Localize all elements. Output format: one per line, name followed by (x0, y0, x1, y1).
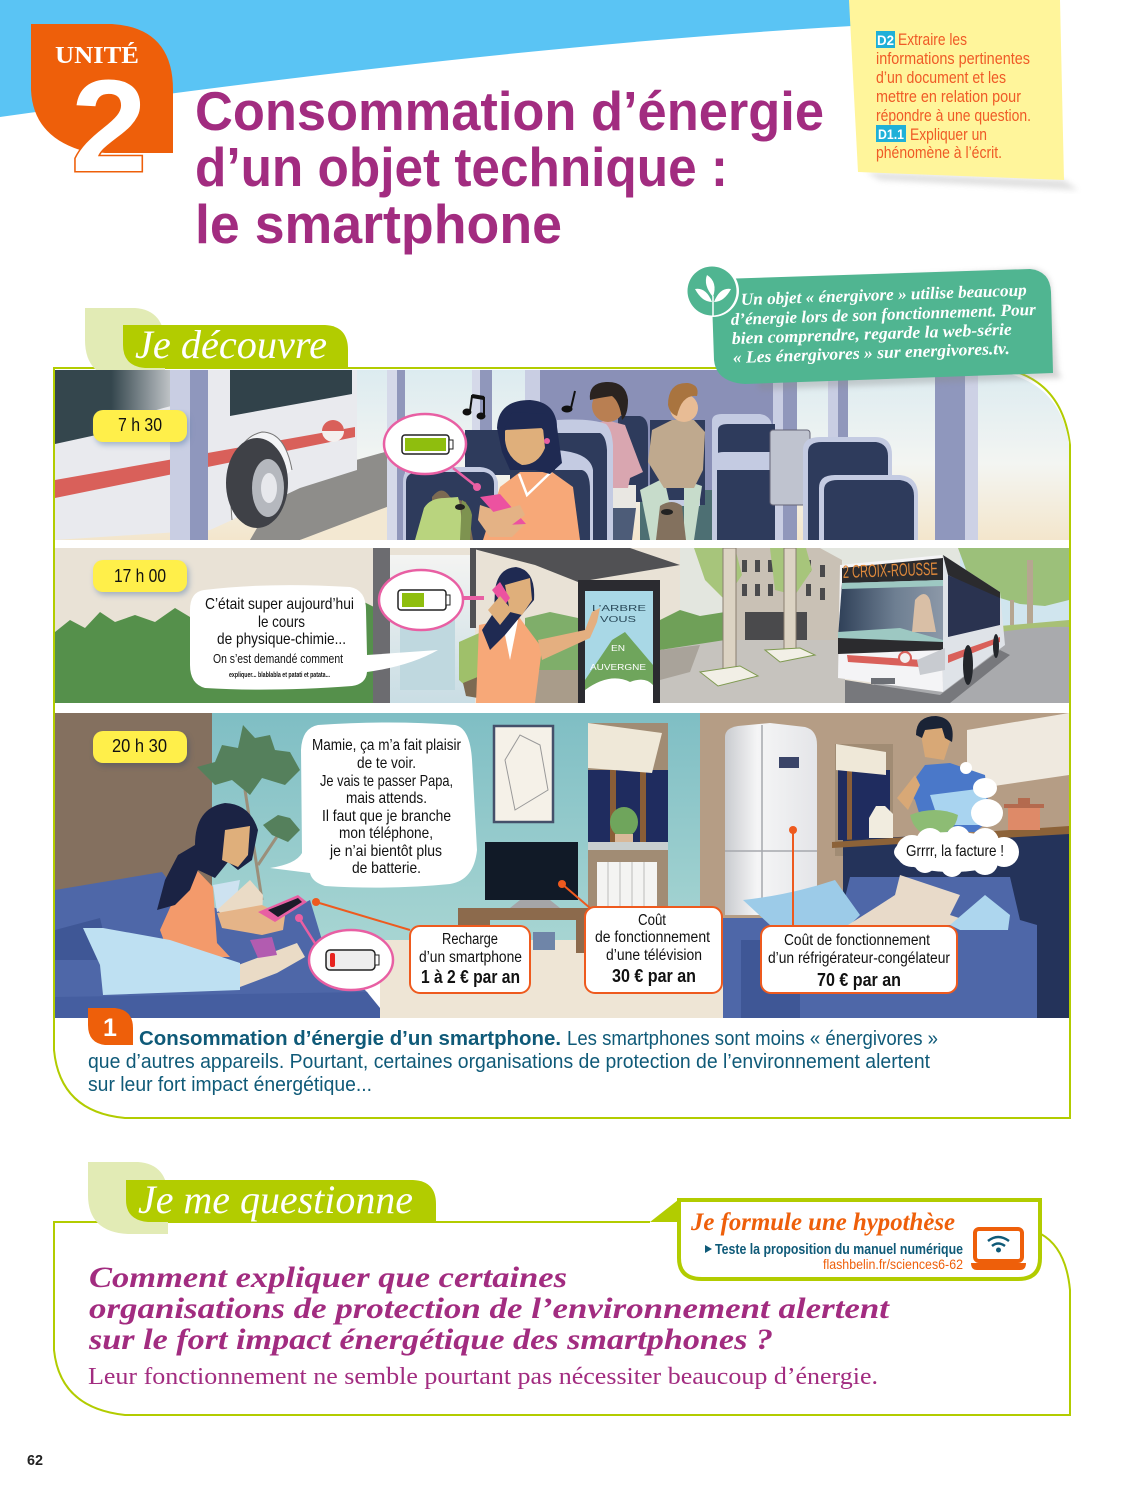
thought cloud: Grrrr, la facture ! (906, 843, 1004, 860)
picture (494, 726, 553, 822)
music notes (463, 391, 575, 419)
speech bubble: evening call: je n’ai bientôt plus (329, 843, 442, 860)
right sofa (723, 875, 1037, 1018)
backpack (415, 490, 473, 540)
sticky note: skills: répondre à une question. (876, 107, 1031, 125)
unit badge: 2 (71, 52, 147, 199)
callout: fridge cost: 70 € par an (817, 970, 901, 990)
background hedge and path (525, 610, 845, 703)
page number: 62 (27, 1452, 43, 1469)
speech bubble: evening call: Je vais te passer Papa, (320, 773, 453, 790)
scene 2: afternoon at the bus stop (55, 548, 1069, 703)
plant (197, 725, 300, 900)
girl at bus stop (459, 567, 600, 703)
hypothesis box: Je formule une hypothèse (690, 1209, 955, 1236)
pillow (83, 928, 240, 995)
back seats right (712, 414, 918, 540)
callout: television cost (585, 907, 722, 993)
hypothesis box: flashbelin.fr/sciences6-62 (823, 1256, 963, 1272)
sticky note: skills: informations pertinentes (876, 50, 1030, 68)
document 1 caption: 1 (103, 1014, 117, 1042)
time label: 7 h 30: 7 h 30 (118, 415, 162, 435)
trees (694, 548, 815, 686)
callout: smartphone cost: Recharge (442, 931, 498, 948)
clouds near man (960, 762, 1003, 827)
heading: je découvre: Je découvre (135, 322, 327, 367)
posts and back wall (170, 370, 978, 540)
poster: EN (611, 644, 625, 653)
hedge (55, 600, 380, 703)
panel: je découvre frame (54, 368, 1070, 1118)
driving question (88, 1261, 891, 1356)
document 1 caption: sur leur fort impact énergétique... (88, 1074, 372, 1096)
green note: énergivore: bien comprendre, regarde la web-série (732, 320, 1012, 348)
document 1 caption: que d’autres appareils. Pourtant, certaines organisations de protection de l’environnement alertent (88, 1051, 930, 1073)
poster (578, 580, 660, 703)
callout: smartphone cost: d’un smartphone (419, 949, 522, 966)
girl on sofa (157, 803, 307, 987)
sticky note: skills: d’un document et les (876, 69, 1006, 87)
fridge (725, 723, 817, 915)
time label: 20 h 30 (93, 731, 189, 766)
icon: laptop with wifi (971, 1229, 1026, 1270)
document 1 caption: Les smartphones sont moins « énergivores » (567, 1028, 938, 1050)
unit badge (31, 24, 173, 199)
speech bubble: after school: de physique-chimie... (217, 631, 346, 648)
girl's sofa (55, 872, 380, 1018)
sticky note: skills: D1.1 (878, 126, 904, 142)
title (195, 80, 824, 255)
speech bubble: after school: expliquer... blablabla et patati et patata... (229, 672, 330, 679)
speech bubble: evening call: Mamie, ça m’a fait plaisir (312, 737, 462, 754)
time label: 20 h 30: 20 h 30 (112, 736, 167, 756)
blue header band (0, 0, 852, 117)
title: Consommation d’énergie (195, 80, 824, 142)
battery callout: low (295, 914, 393, 990)
driving question: sur le fort impact énergétique des smartphones ? (88, 1323, 773, 1356)
unit badge: UNITÉ (55, 43, 139, 69)
callout: television cost: 30 € par an (612, 966, 696, 986)
speech bubble: evening call: de te voir. (357, 755, 416, 772)
green note: énergivore (687, 265, 1062, 390)
panel: je me questionne frame (54, 1222, 1070, 1415)
driving question: organisations de protection de l’environnement alertent (89, 1292, 891, 1325)
speech bubble: evening call: mon téléphone, (339, 825, 433, 842)
seats around girl (403, 420, 613, 540)
callout: fridge cost: Coût de fonctionnement (784, 932, 931, 949)
shelter (373, 548, 680, 703)
sticky note: skills (849, 0, 1078, 190)
bus: 2 CROIX-ROUSSE (842, 559, 938, 582)
callout: fridge cost (761, 926, 957, 993)
hypothesis box (650, 1200, 1040, 1279)
bus (838, 555, 1005, 692)
speech bubble: evening call (270, 722, 477, 888)
man (897, 716, 990, 835)
boy 1 (585, 382, 643, 540)
sticky note: skills: Expliquer un (910, 126, 987, 144)
far tree and road (845, 548, 1069, 703)
title: d’un objet technique : (195, 136, 728, 198)
hypothesis box: Teste la proposition du manuel numérique (715, 1241, 963, 1258)
callout: fridge cost: d’un réfrigérateur-congélateur (768, 950, 950, 967)
heading: je découvre (85, 308, 348, 380)
building (736, 548, 842, 640)
callout: smartphone cost (410, 926, 530, 993)
speech bubble: evening call: Il faut que je branche (322, 808, 451, 825)
callout: television cost: Coût (638, 912, 667, 929)
callout: television cost: de fonctionnement (595, 929, 711, 946)
tv and stand (458, 842, 600, 953)
heading: je me questionne (88, 1162, 436, 1234)
document 1 caption: Consommation d’énergie d’un smartphone. (139, 1028, 561, 1050)
callout lines (312, 826, 797, 930)
icon: leaves (695, 275, 731, 316)
time label: 17 h 00 (93, 560, 189, 595)
speech bubble: after school (190, 585, 438, 690)
driving question: Comment expliquer que certaines (89, 1261, 567, 1294)
bus outside (55, 370, 392, 540)
green note: énergivore: Un objet « énergivore » utilise beaucoup (741, 281, 1027, 309)
thought cloud (894, 826, 1019, 877)
speech bubble: evening call: de batterie. (352, 860, 421, 877)
callout: smartphone cost: 1 à 2 € par an (421, 967, 520, 987)
speech bubble: after school: C’était super aujourd’hui (205, 596, 354, 613)
speech bubble: after school: le cours (258, 614, 305, 631)
sticky note: skills: D2 (877, 32, 894, 48)
poster: L’ARBRE (592, 604, 646, 613)
poster: VOUS (600, 615, 636, 624)
sticky note: skills: phénomène à l’écrit. (876, 144, 1002, 162)
speech bubble: evening call: mais attends. (346, 790, 427, 807)
heading: je me questionne: Je me questionne (138, 1177, 413, 1222)
battery callout: half (379, 570, 484, 630)
question subtext: Leur fonctionnement ne semble pourtant pas nécessiter beaucoup d’énergie. (88, 1364, 878, 1390)
girl (478, 400, 580, 540)
green note: énergivore: « Les énergivores » sur energivores.tv. (733, 339, 1010, 367)
scene 1: morning on the bus (55, 370, 1070, 540)
title: le smartphone (195, 193, 562, 255)
scene 3: evening at home (55, 713, 1070, 1018)
boys' seats (618, 416, 705, 506)
speech bubble: after school: On s’est demandé comment (213, 651, 343, 666)
boy 2 (640, 383, 705, 540)
sticky note: skills: Extraire les (898, 31, 967, 49)
kitchen (832, 713, 1069, 1018)
green note: énergivore: d’énergie lors de son fonctionnement. Pour (731, 300, 1036, 329)
callout: television cost: d’une télévision (606, 947, 702, 964)
document 1 caption (88, 1008, 938, 1096)
window and radiator (588, 723, 668, 910)
time label: 17 h 00: 17 h 00 (114, 566, 166, 586)
walls and floor (55, 713, 1070, 1018)
poster: AUVERGNE (590, 663, 646, 672)
sticky note: skills: mettre en relation pour (876, 88, 1021, 106)
battery callout: full (384, 414, 481, 491)
time label: 7 h 30 (93, 410, 189, 445)
